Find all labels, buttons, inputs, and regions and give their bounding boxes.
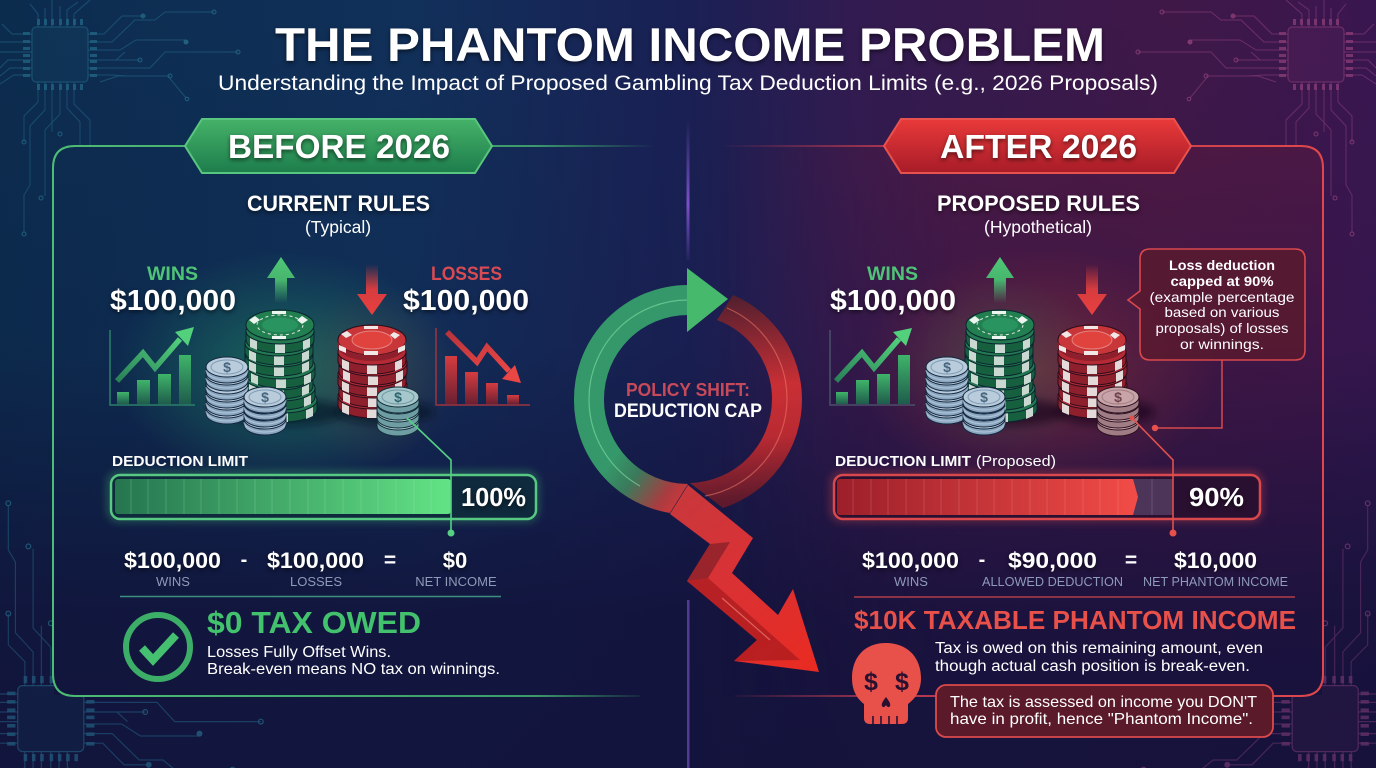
equation: losses: $100,000	[267, 548, 364, 573]
equation: net income: NET INCOME	[415, 574, 497, 589]
icon: pink coin stack: $	[1114, 389, 1122, 405]
icon: down arrow	[357, 264, 387, 315]
label: policy shift: POLICY SHIFT:	[626, 379, 750, 400]
icon: silver coin stack front	[244, 387, 286, 435]
callout: loss deduction cap: Loss deduction	[1169, 257, 1275, 273]
heading: current rules: CURRENT RULES	[247, 191, 430, 216]
equation: losses	[267, 548, 364, 589]
chart: rising	[110, 327, 195, 405]
chip stacks	[926, 310, 1155, 436]
equation	[862, 548, 1288, 589]
icon: silver coin stack front: $	[261, 389, 269, 405]
center divider line	[686, 120, 690, 768]
circuit: top left	[0, 0, 240, 236]
chip glow	[860, 245, 1220, 495]
icon: small coin stack	[377, 387, 419, 436]
callout: loss deduction cap: (example percentage	[1150, 289, 1295, 305]
text: tax explanation: though actual cash position is break-even.	[935, 658, 1250, 675]
equation: allowed deduction: ALLOWED DEDUCTION	[982, 574, 1123, 589]
bar: 100 percent: 100%	[461, 482, 526, 512]
equation: allowed deduction	[982, 548, 1123, 589]
subtitle: Understanding the Impact of Proposed Gambling Tax Deduction Limits (e.g., 2026 Proposals)	[218, 71, 1158, 95]
icon: up arrow	[267, 257, 295, 303]
wins figure: $100,000	[110, 285, 236, 317]
icon: check circle	[126, 615, 190, 679]
circuit: bottom right	[1141, 500, 1376, 768]
losses figure: LOSSES	[431, 264, 502, 285]
wins figure: $100,000	[830, 285, 956, 317]
losses figure	[403, 264, 529, 317]
heading: proposed rules	[937, 191, 1140, 237]
icon: silver coin stack back	[926, 357, 968, 424]
icon: down arrow	[1077, 264, 1107, 315]
callout: loss deduction cap: or winnings.	[1180, 336, 1264, 352]
callout: loss deduction cap: based on various	[1164, 304, 1280, 320]
result: taxable phantom income: $10K TAXABLE PHANTOM INCOME	[854, 605, 1296, 635]
panel: after 2026	[720, 119, 1323, 737]
red ring arc	[690, 295, 802, 508]
icon: small coin stack: $	[394, 389, 402, 405]
bar: 90 percent: 90%	[1189, 482, 1244, 512]
wins figure: WINS	[147, 264, 198, 285]
label: deduction limit proposed: DEDUCTION LIMIT	[835, 453, 971, 470]
equation: net phantom income: NET PHANTOM INCOME	[1143, 574, 1288, 589]
heading: current rules	[247, 191, 430, 237]
label: deduction limit proposed	[835, 453, 1056, 470]
equation: wins: WINS	[894, 574, 928, 589]
chart: falling	[436, 328, 530, 405]
wins figure	[110, 264, 236, 317]
label: policy shift	[614, 379, 762, 422]
callout: phantom income note	[936, 685, 1273, 737]
equation	[124, 548, 497, 589]
icon: red chip stack	[1058, 325, 1127, 418]
result: zero tax owed: Break-even means NO tax on winnings.	[207, 661, 500, 678]
losses figure: $100,000	[403, 285, 529, 317]
wins figure: WINS	[867, 264, 918, 285]
equation: wins: $100,000	[862, 548, 959, 573]
icon: up arrow	[986, 257, 1014, 303]
green ring arc and zigzag	[574, 268, 819, 672]
icon: skull	[852, 643, 921, 724]
icon: green chip stack	[965, 310, 1037, 422]
connector: coin to net phantom income	[1130, 416, 1176, 536]
icon: silver coin stack back: $	[943, 359, 951, 375]
icon: green chip stack	[245, 310, 317, 422]
equation: wins	[124, 548, 221, 589]
icon: silver coin stack front: $	[980, 389, 988, 405]
label: deduction limit proposed: (Proposed)	[976, 453, 1056, 470]
equation: allowed deduction: $90,000	[1008, 548, 1097, 573]
bar: 100 percent	[110, 474, 536, 519]
bar: 90 percent	[833, 474, 1260, 519]
icon: silver coin stack back	[206, 357, 248, 424]
text: tax explanation	[935, 640, 1263, 675]
equation: wins	[862, 548, 959, 589]
callout: loss deduction cap: capped at 90%	[1170, 273, 1274, 289]
badge: after 2026	[884, 119, 1191, 173]
callout: loss deduction cap	[1128, 249, 1305, 360]
policy shift arrow	[574, 268, 819, 672]
panel outline	[53, 146, 655, 696]
icon: red chip stack	[338, 325, 407, 418]
equation: net phantom income	[1143, 548, 1288, 589]
heading: current rules: (Typical)	[305, 217, 371, 237]
connector: coin to net income	[407, 418, 454, 536]
heading: proposed rules: PROPOSED RULES	[937, 191, 1140, 216]
result: zero tax owed: Losses Fully Offset Wins.	[207, 644, 391, 661]
equation: wins: $100,000	[124, 548, 221, 573]
callout: loss deduction cap: proposals) of losses	[1156, 320, 1288, 336]
chip stacks	[206, 310, 435, 436]
label: policy shift: DEDUCTION CAP	[614, 401, 762, 422]
icon: pink coin stack	[1097, 387, 1139, 436]
equation: wins: WINS	[156, 574, 190, 589]
equation: equals: =	[1125, 549, 1137, 572]
equation: minus: -	[979, 549, 985, 571]
badge: after 2026: AFTER 2026	[940, 128, 1137, 165]
equation: equals: =	[384, 549, 396, 572]
panel fill and outline	[720, 146, 1323, 696]
label: deduction limit: DEDUCTION LIMIT	[112, 453, 248, 470]
title: THE PHANTOM INCOME PROBLEM	[275, 18, 1105, 71]
result: zero tax owed	[207, 605, 500, 678]
icon: silver coin stack back: $	[223, 359, 231, 375]
wins figure	[830, 264, 956, 317]
result: zero tax owed: $0 TAX OWED	[207, 605, 421, 640]
callout: phantom income note: have in profit, hence "Phantom Income".	[950, 711, 1253, 728]
icon: skull: $	[864, 668, 878, 696]
icon: skull: $	[895, 668, 909, 696]
equation: losses: LOSSES	[290, 574, 342, 589]
chip glow	[115, 250, 455, 490]
circuit: bottom left	[0, 501, 263, 768]
panel: before 2026	[53, 119, 655, 696]
equation: net income	[415, 548, 497, 589]
icon: silver coin stack front	[963, 387, 1005, 435]
text: tax explanation: Tax is owed on this remaining amount, even	[935, 640, 1263, 657]
chart: rising	[830, 328, 915, 405]
circuit: top right	[1136, 0, 1376, 236]
connector: callout to chips	[1152, 360, 1222, 431]
heading: proposed rules: (Hypothetical)	[984, 217, 1092, 237]
callout: phantom income note: The tax is assessed on income you DON'T	[950, 694, 1257, 711]
equation: net phantom income: $10,000	[1174, 548, 1257, 573]
equation: net income: $0	[443, 548, 467, 573]
badge: before 2026: BEFORE 2026	[228, 128, 450, 165]
badge: before 2026	[185, 119, 492, 173]
equation: minus: -	[241, 549, 247, 571]
